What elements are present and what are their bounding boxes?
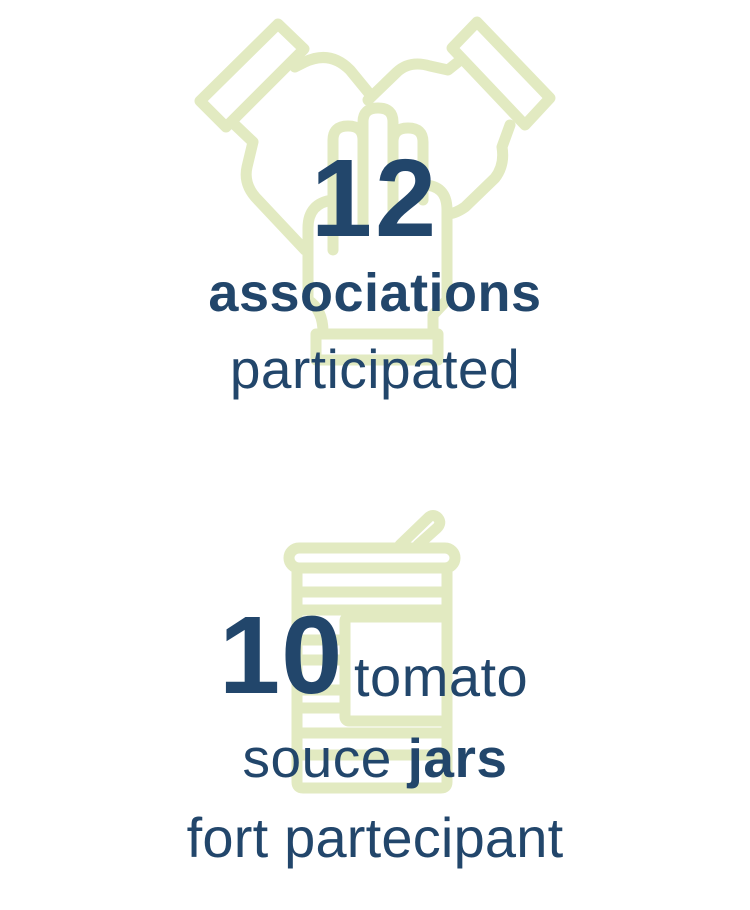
- label: associations: associations: [208, 263, 542, 323]
- label: souce jars: souce jars: [243, 727, 507, 789]
- label: fort partecipant: fort partecipant: [187, 806, 563, 869]
- stat: 10: 10: [219, 594, 343, 717]
- label: participated: participated: [230, 338, 520, 400]
- label: tomato: tomato: [354, 645, 528, 708]
- stat: 12: 12: [311, 137, 439, 260]
